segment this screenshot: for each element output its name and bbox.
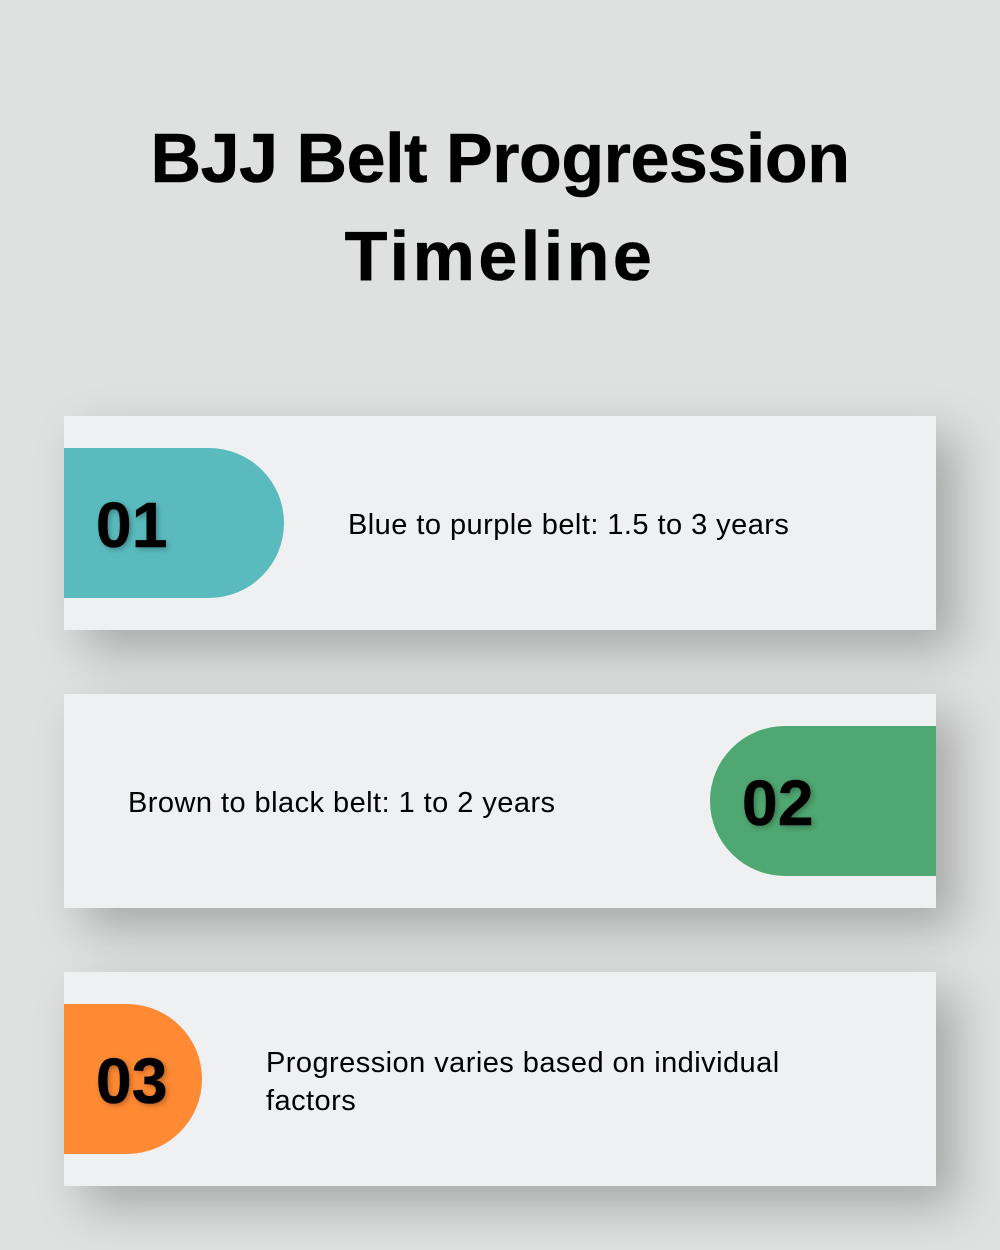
title <box>150 119 850 295</box>
panel: step 01 <box>64 416 936 630</box>
number: 03: 03 <box>96 1045 168 1117</box>
badge: 02 <box>710 726 936 876</box>
text: progression varies: Progression varies based on individual <box>266 1047 780 1079</box>
panel: step 03 <box>64 972 936 1186</box>
badge: 03 <box>64 1004 202 1154</box>
text: brown to black: Brown to black belt: 1 to 2 years <box>128 787 556 819</box>
title: BJJ Belt Progression <box>150 119 850 197</box>
number: 01: 01 <box>96 489 168 561</box>
text: progression varies <box>266 1047 780 1117</box>
text: blue to purple: Blue to purple belt: 1.5 to 3 years <box>348 509 789 541</box>
text: progression varies: factors <box>266 1085 356 1117</box>
panel: step 02 <box>64 694 936 908</box>
badge: 01 <box>64 448 284 598</box>
number: 02: 02 <box>742 767 814 839</box>
title: Timeline <box>345 217 655 295</box>
